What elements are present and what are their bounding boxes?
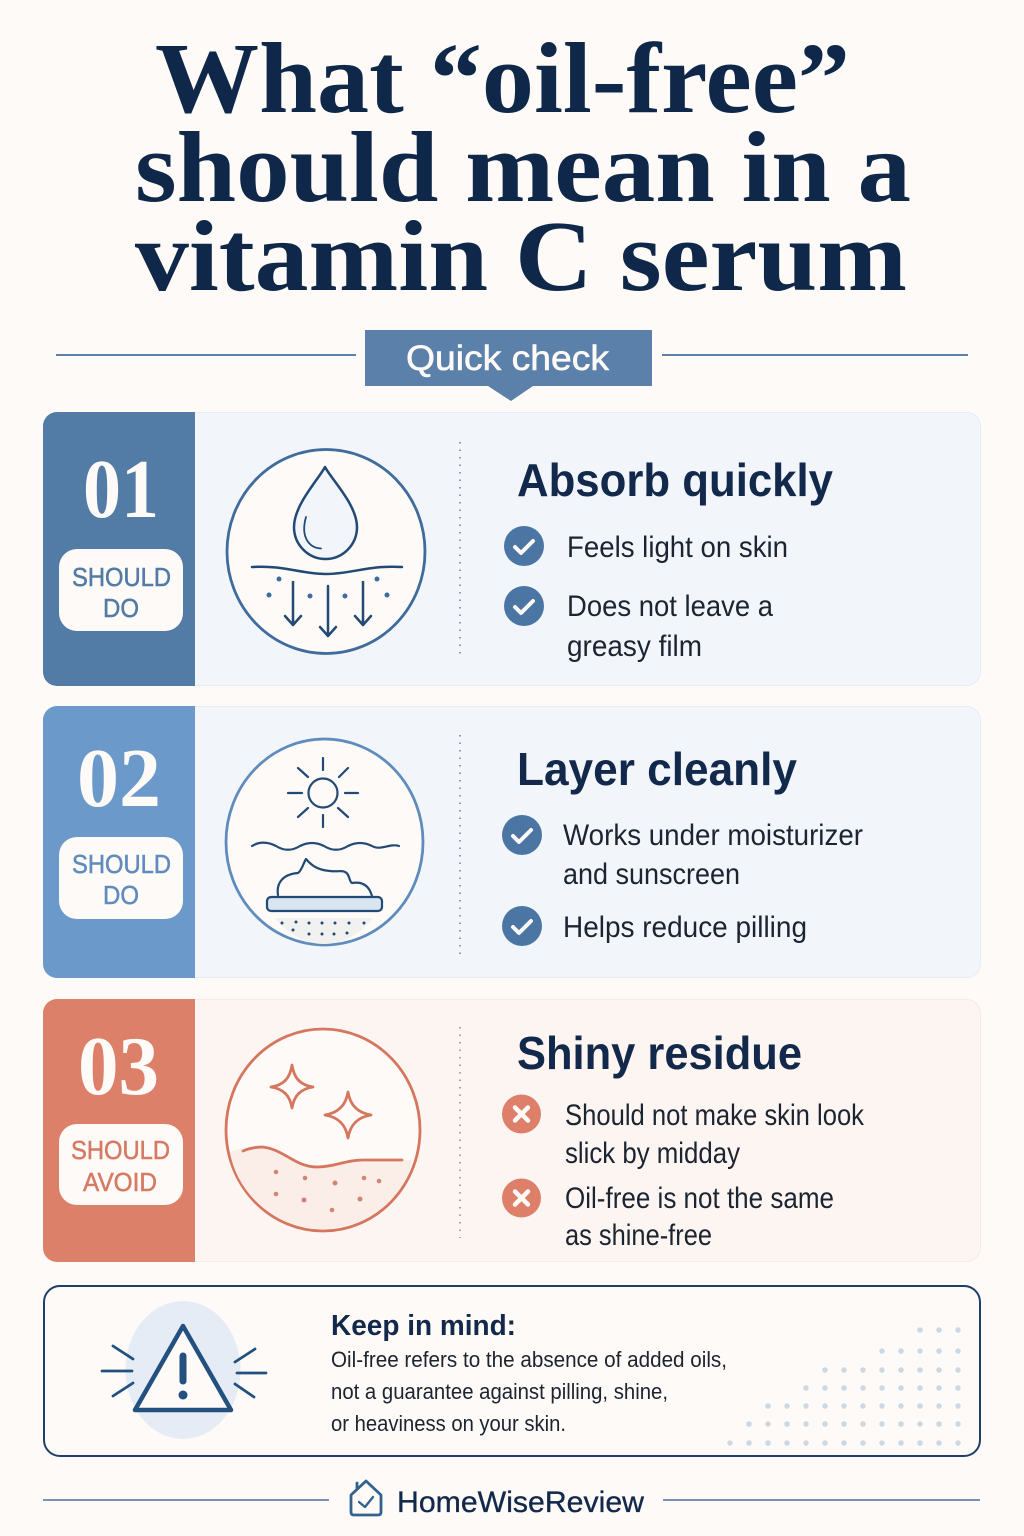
heading: absorb quickly: Absorb quickly <box>517 454 833 506</box>
panel: 01 absorb quickly <box>43 412 980 686</box>
number tab 01 <box>43 412 195 686</box>
quick check banner <box>365 330 652 401</box>
icon: droplet absorbing into skin <box>227 450 425 654</box>
check item: no greasy film <box>504 586 774 663</box>
check item: reduces pilling <box>502 906 807 946</box>
icon: shiny sparkles over skin <box>226 1029 420 1231</box>
icon: house with check <box>351 1481 381 1515</box>
number tab 03: SHOULD <box>71 1135 170 1165</box>
number tab 03 <box>43 999 195 1262</box>
check item: no greasy film: greasy film <box>567 630 702 663</box>
avoid item: not shine-free <box>502 1178 834 1252</box>
avoid item: slick by midday <box>502 1094 864 1170</box>
number tab 03: 03 <box>78 1020 159 1113</box>
number tab 01: 01 <box>83 443 159 536</box>
panel: 03 shiny residue <box>43 999 980 1262</box>
title: vitamin C serum <box>135 200 907 312</box>
heading: layer cleanly: Layer cleanly <box>517 743 797 795</box>
keep in mind text: or heaviness on your skin. <box>331 1411 566 1436</box>
number tab 02 <box>43 706 195 978</box>
keep in mind text: Oil-free refers to the absence of added oils, <box>331 1347 727 1372</box>
quick check banner: Quick check <box>406 339 610 378</box>
title <box>135 22 911 312</box>
footer brand: HomeWiseReview: HomeWiseReview <box>397 1486 644 1519</box>
check item: works under moisturizer <box>502 815 863 891</box>
heading: shiny residue: Shiny residue <box>517 1027 802 1079</box>
icon: warning triangle <box>102 1301 266 1439</box>
number tab 03: AVOID <box>83 1167 157 1197</box>
avoid item: slick by midday: Should not make skin look <box>565 1099 864 1132</box>
check item: no greasy film: Does not leave a <box>567 590 774 623</box>
avoid item: not shine-free: as shine-free <box>565 1219 712 1252</box>
keep in mind text <box>331 1310 727 1436</box>
avoid item: not shine-free: Oil-free is not the same <box>565 1182 834 1215</box>
check item: feels light <box>504 526 788 566</box>
check item: works under moisturizer: Works under moisturizer <box>563 819 863 852</box>
title: should mean in a <box>135 111 911 223</box>
icon: sun, wave and cream layer <box>226 739 423 945</box>
check item: works under moisturizer: and sunscreen <box>563 858 740 891</box>
number tab 01: DO <box>103 593 139 623</box>
avoid item: slick by midday: slick by midday <box>565 1137 740 1170</box>
number tab 02: DO <box>103 880 139 910</box>
panel: keep in mind <box>44 1286 980 1456</box>
check item: reduces pilling: Helps reduce pilling <box>563 911 807 944</box>
number tab 02: SHOULD <box>72 849 171 879</box>
number tab 01: SHOULD <box>72 562 171 592</box>
number tab 02: 02 <box>77 732 161 825</box>
panel: 02 layer cleanly <box>43 706 980 978</box>
title: What “oil-free” <box>155 22 850 134</box>
keep in mind text: Keep in mind: <box>331 1310 516 1342</box>
keep in mind text: not a guarantee against pilling, shine, <box>331 1379 668 1404</box>
check item: feels light: Feels light on skin <box>567 531 788 564</box>
